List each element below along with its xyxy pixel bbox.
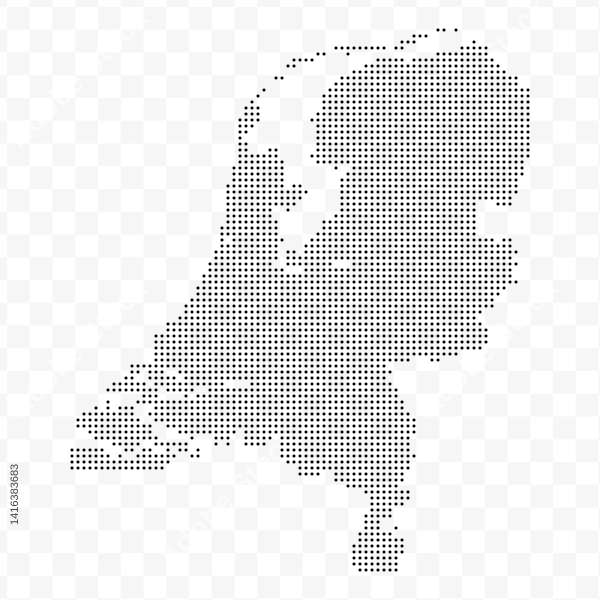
vertical stock ID number: 1416383683 [9, 464, 21, 525]
stock watermark: Adobe Stock [2, 2, 155, 155]
stock watermark: Adobe Stock [272, 142, 425, 295]
stock watermark: Adobe Stock [152, 422, 305, 575]
stock watermark: Adobe Stock [412, 272, 565, 425]
dotted map of the Netherlands [72, 30, 528, 570]
stock watermark: Adobe Stock [2, 272, 155, 425]
